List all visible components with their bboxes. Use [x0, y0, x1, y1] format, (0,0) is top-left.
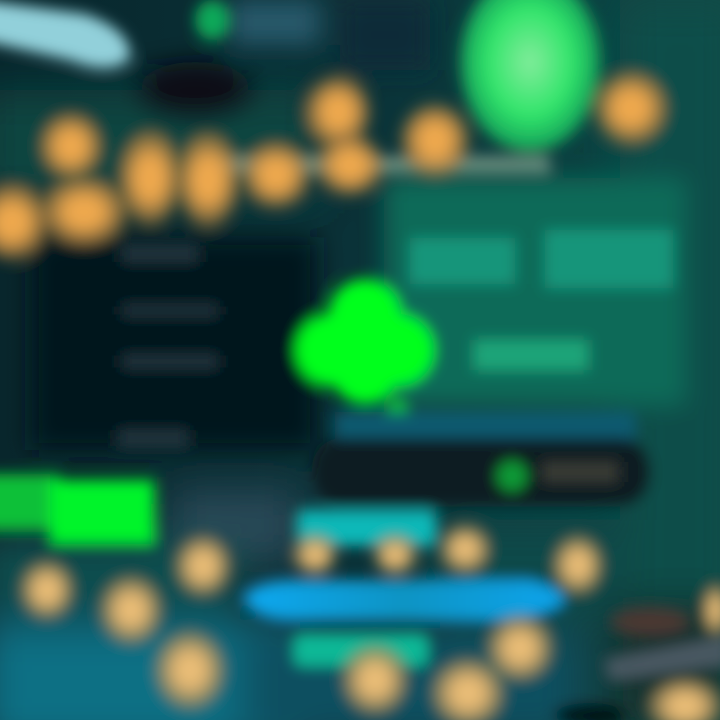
text: pill label: [542, 462, 618, 482]
panel: blue-teal gradient under clover: [335, 412, 635, 440]
icon: small green marker: [497, 461, 527, 491]
band: lower teal block: [294, 634, 428, 666]
hero: light blue blob: [0, 0, 130, 68]
text block: green rows: [410, 230, 673, 370]
dot row: upper: [0, 68, 671, 264]
icon: bright green clover: [296, 279, 434, 434]
panel: green right block: [384, 178, 686, 406]
panel: dark left block: [32, 238, 317, 450]
panel: dark pill: [312, 438, 650, 506]
illustration: large green oval: [460, 0, 600, 152]
text block: blurred rows: [118, 246, 218, 446]
panel: bright green left block: [0, 474, 154, 544]
band: blue bar: [244, 580, 564, 620]
band: grey horizontal bar: [200, 156, 550, 174]
dot row: lower: [18, 523, 720, 720]
band: teal block: [298, 510, 436, 546]
accent: bottom dark corner: [554, 703, 626, 720]
icon: top green mark: [195, 0, 229, 40]
accent: bottom right reddish tint: [612, 610, 688, 634]
band: bottom right grey bar: [605, 636, 720, 680]
panel: dark top band: [140, 0, 430, 114]
